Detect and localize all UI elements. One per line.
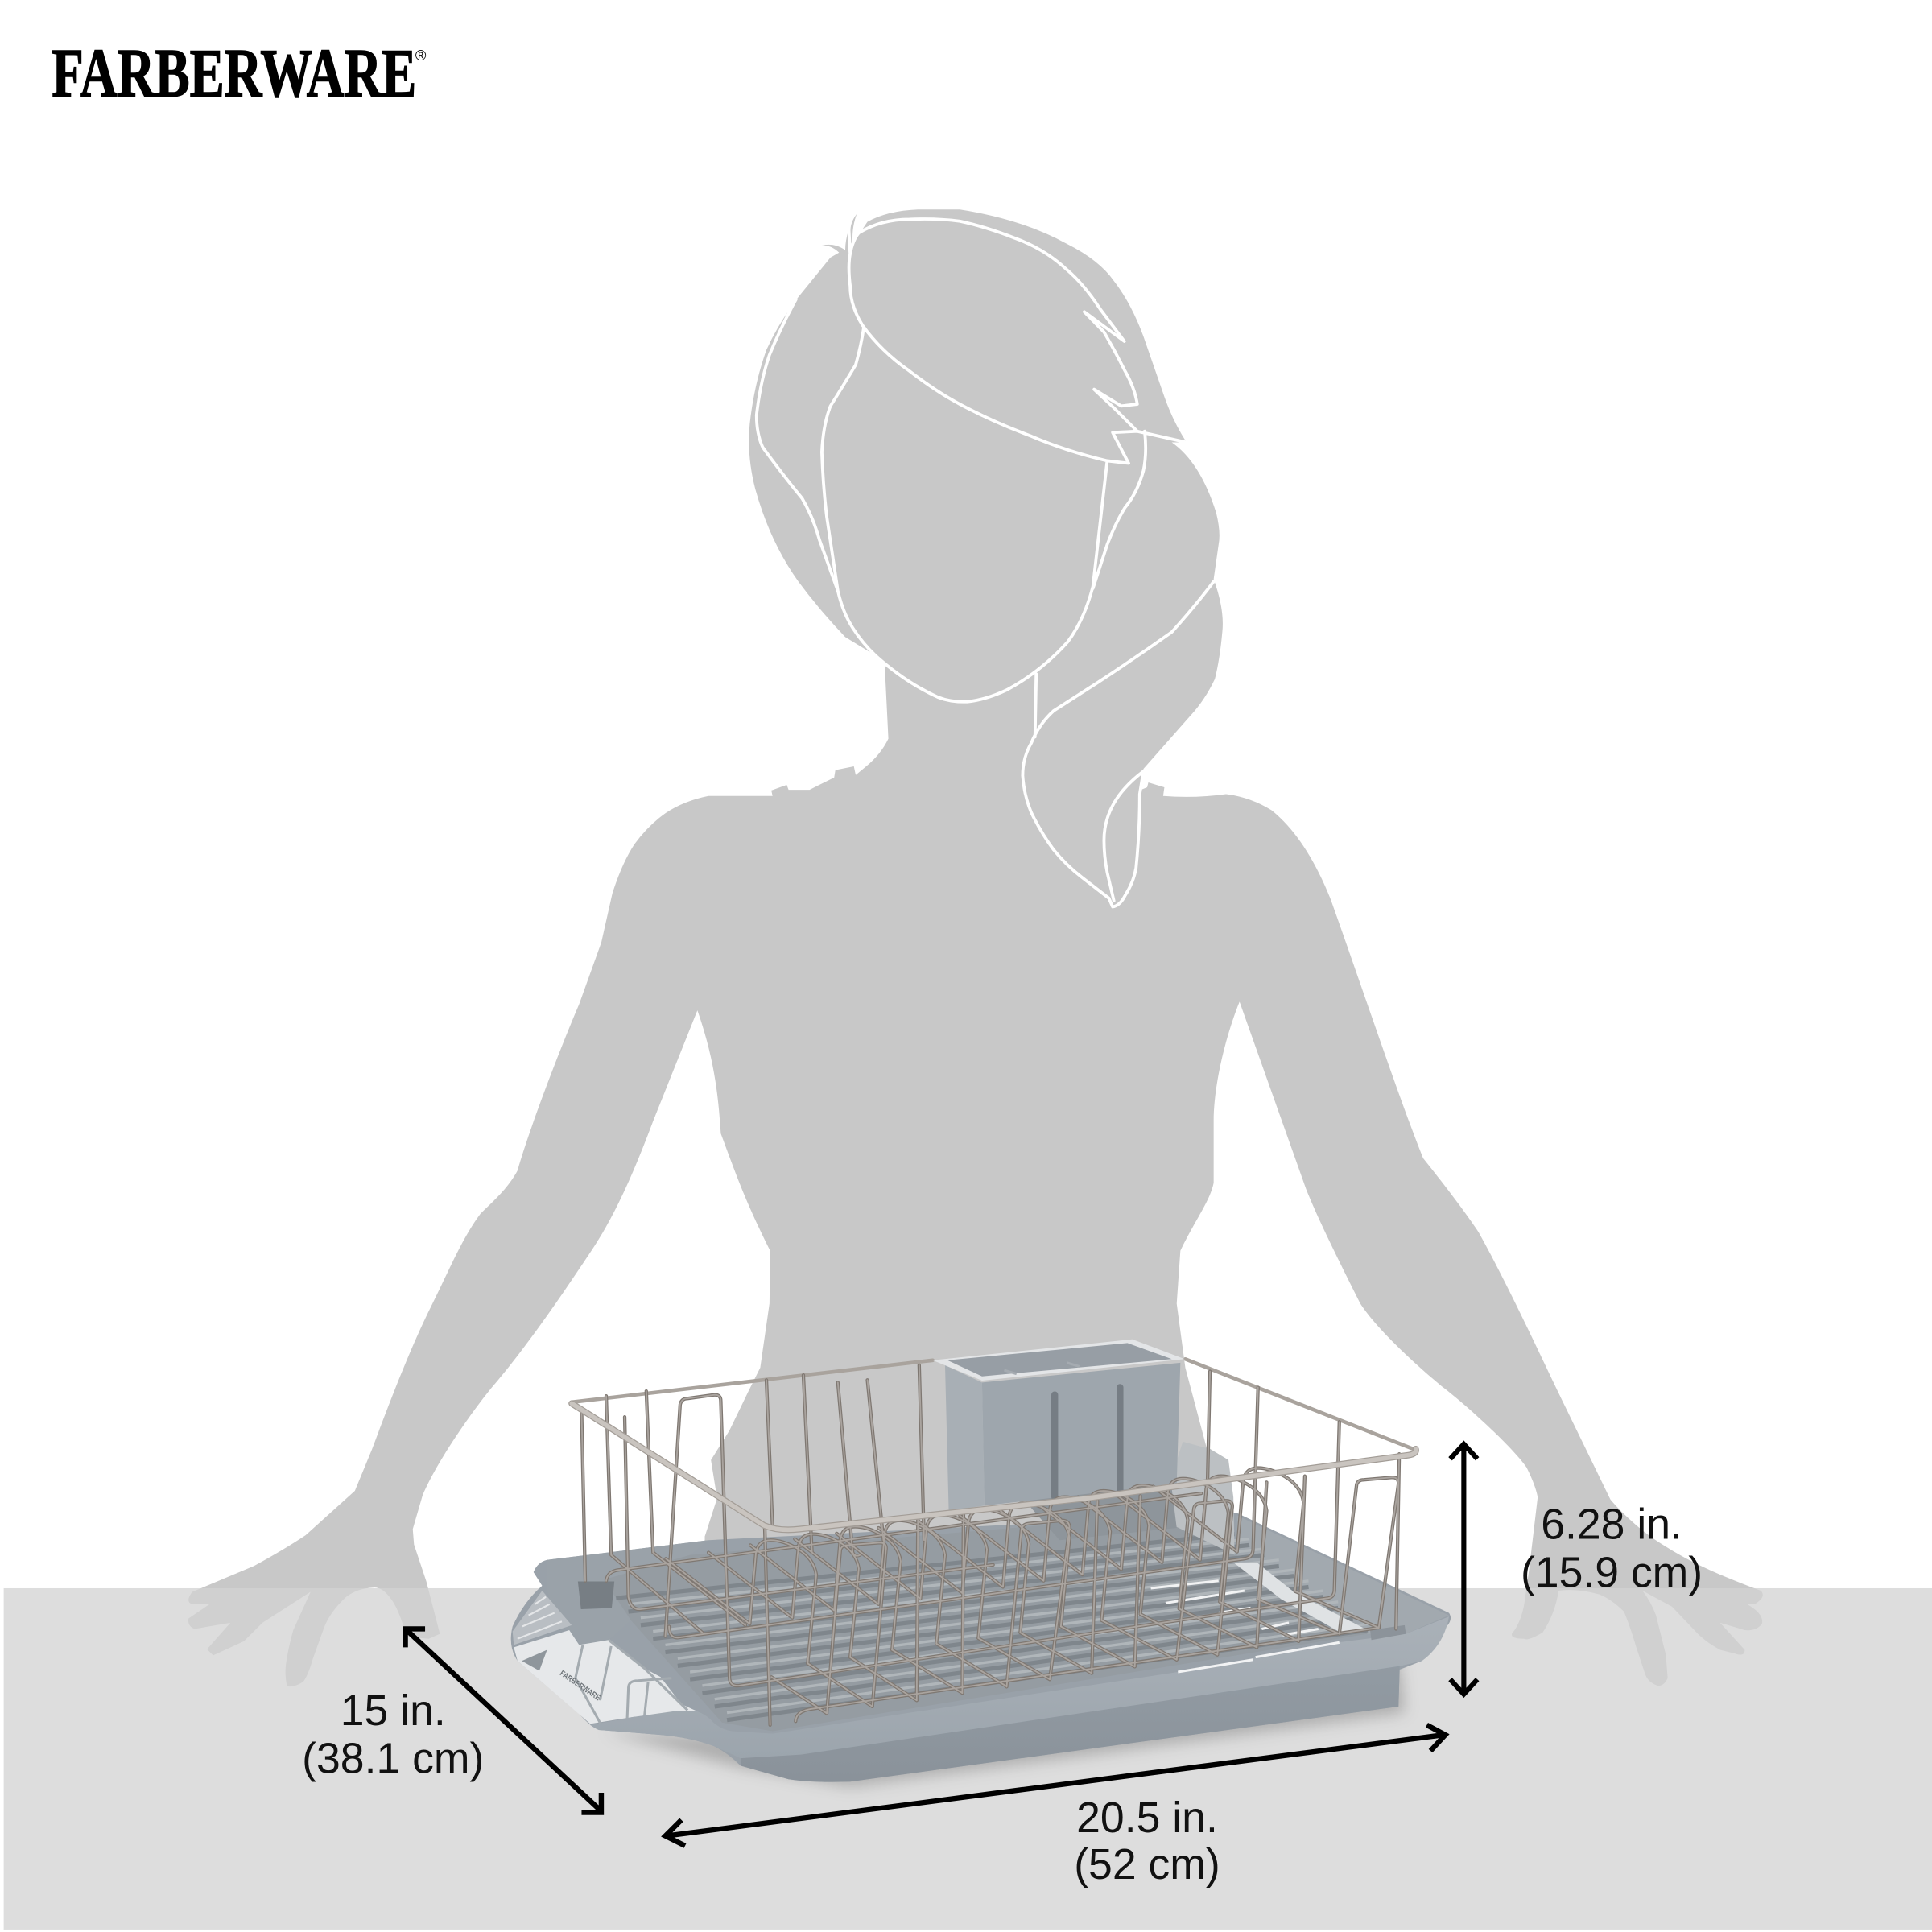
logo: Farberware: FARBERWARE [52,35,416,111]
tray floor [604,1511,1368,1732]
cup rim [933,1340,1185,1381]
cup left facet [945,1365,985,1511]
silhouette body fill [188,209,1763,1686]
back left inner wall [547,1540,708,1645]
right floor highlights [1233,1563,1365,1634]
hair and face contour lines [757,209,1214,907]
cup front face [982,1363,1180,1505]
left reflective area [514,1630,697,1724]
tray ribs light [629,1539,1368,1713]
label: width: 20.5 in. [1076,1794,1218,1842]
woman silhouette [188,209,1763,1686]
tray base [741,1663,1400,1782]
label: height: 6.28 in. [1541,1501,1682,1549]
tray ribs dark [616,1534,1368,1720]
embossed brand mark: FARBERWARE [558,1669,602,1703]
top front rail [572,1403,1416,1530]
tray shadow [604,1663,1405,1786]
right foot clip [1370,1625,1406,1640]
cup grooves [1055,1387,1120,1497]
logo: Farberware: ® [415,47,427,64]
wire basket highlight layer [581,1365,1399,1725]
striped reflection [513,1591,572,1645]
cup lower body [1022,1479,1177,1540]
arrow: width 20.5 in [666,1725,1445,1846]
tray outer shape [511,1513,1451,1782]
label: depth: 15 in. [341,1687,446,1735]
wire basket shadow layer [581,1365,1399,1725]
arrow: depth 15 in [406,1629,601,1813]
drip tray [511,1511,1451,1782]
panel behind cup [1158,1442,1235,1555]
reflection lines [518,1597,562,1639]
front lip [590,1616,1449,1758]
cup interior [947,1343,1172,1377]
reflected wire lines [576,1640,687,1725]
cup inner ridges [1004,1363,1080,1374]
left foot clip [578,1582,614,1609]
dark reflection triangle [522,1649,547,1671]
top front rail highlight [572,1403,1416,1530]
utensil cup [933,1340,1185,1540]
arrow: height 6.28 in [1451,1444,1477,1695]
right inner wall [1237,1516,1449,1634]
label: depth: (38.1 cm) [302,1736,484,1783]
table surface [4,1588,1932,1930]
dish rack product [511,1340,1451,1786]
label: width: (52 cm) [1074,1841,1220,1889]
back rail [572,1359,1414,1449]
label: height: (15.9 cm) [1521,1549,1703,1596]
white water streaks [1151,1581,1340,1672]
